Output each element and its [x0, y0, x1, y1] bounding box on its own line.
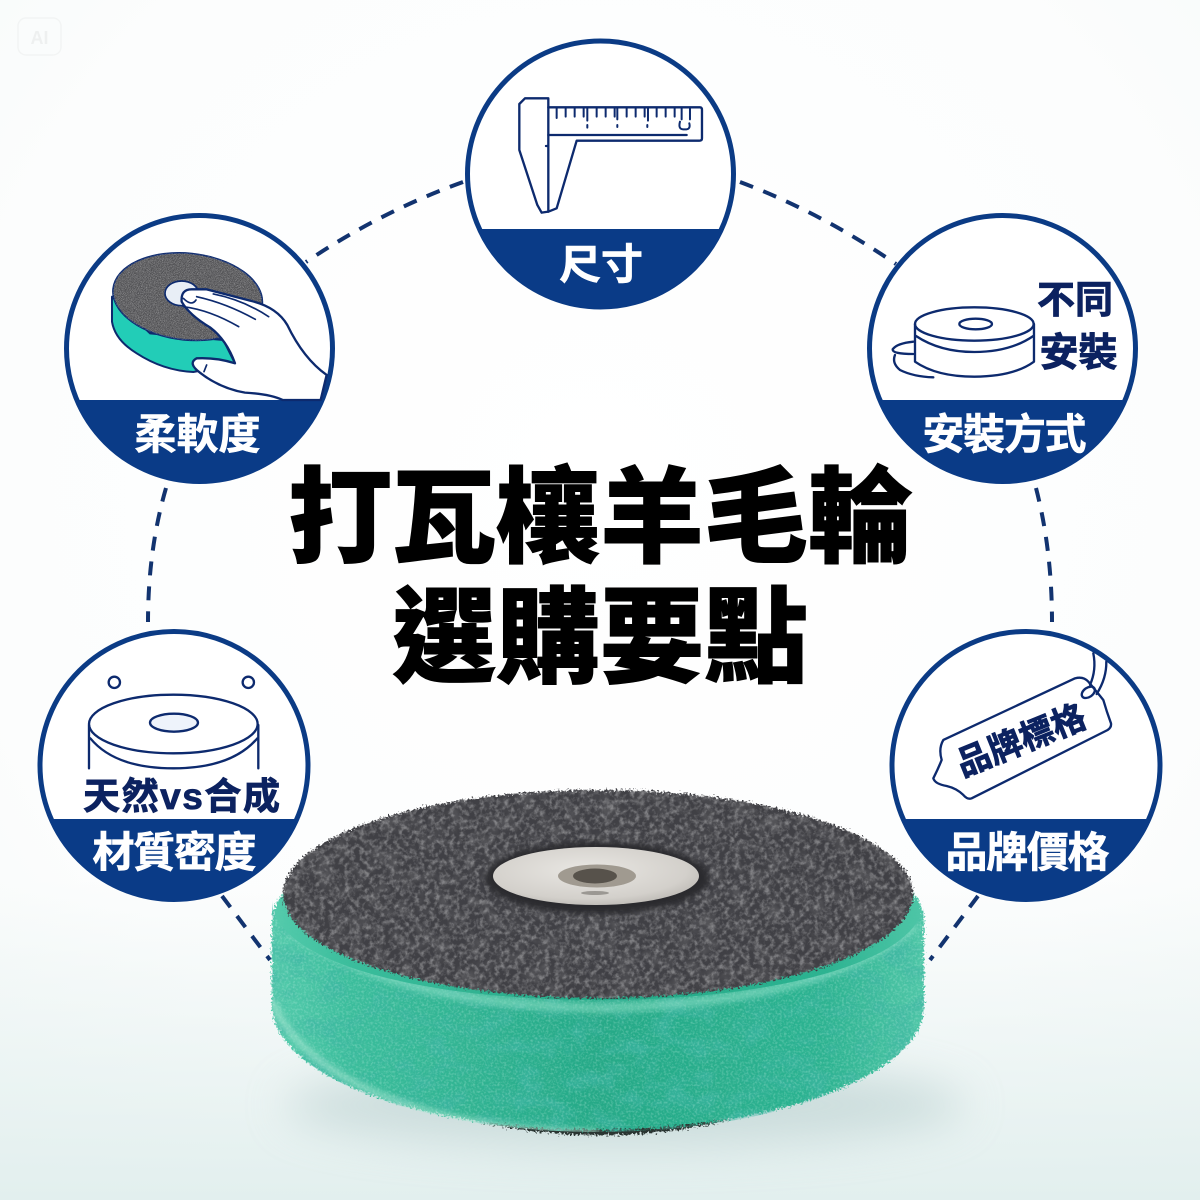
label: softness: 柔軟度 — [134, 411, 261, 458]
panel: size — [468, 41, 734, 308]
panel: brand price — [892, 632, 1160, 901]
metal hub — [493, 847, 699, 905]
side note: different mounting — [1037, 280, 1118, 375]
panel: softness — [66, 216, 332, 484]
panel: mounting — [870, 216, 1136, 484]
label: material density: 材質密度 — [92, 829, 256, 876]
tag text: brand label: 品牌標格 — [951, 698, 1092, 784]
icon: price tag — [933, 653, 1111, 799]
side note: different mounting: 不同 — [1037, 280, 1113, 322]
label: size: 尺寸 — [559, 241, 643, 288]
floor shadow — [285, 1063, 965, 1147]
icon: mounted pad — [893, 307, 1034, 377]
title — [288, 433, 912, 704]
label: brand price: 品牌價格 — [946, 829, 1110, 876]
icon: pad cross-section — [89, 677, 258, 768]
panel: material density — [40, 632, 308, 901]
title: 打瓦欀羊毛輪 — [288, 433, 912, 584]
dark wool top — [280, 788, 916, 1000]
icon: caliper — [519, 98, 702, 213]
icon: hand pressing pad — [109, 246, 327, 400]
product photo: wool buffing wheel — [265, 788, 965, 1147]
watermark: AI badge: AI — [30, 28, 48, 48]
title: 選購要點 — [392, 553, 808, 704]
note: natural vs synthetic: 天然vs合成 — [83, 776, 280, 817]
dashed connector ring — [148, 182, 1052, 960]
green foam side — [265, 882, 935, 1140]
side note: different mounting: 安裝 — [1039, 332, 1118, 375]
watermark: AI badge — [18, 18, 61, 55]
label: mounting: 安裝方式 — [922, 411, 1086, 458]
